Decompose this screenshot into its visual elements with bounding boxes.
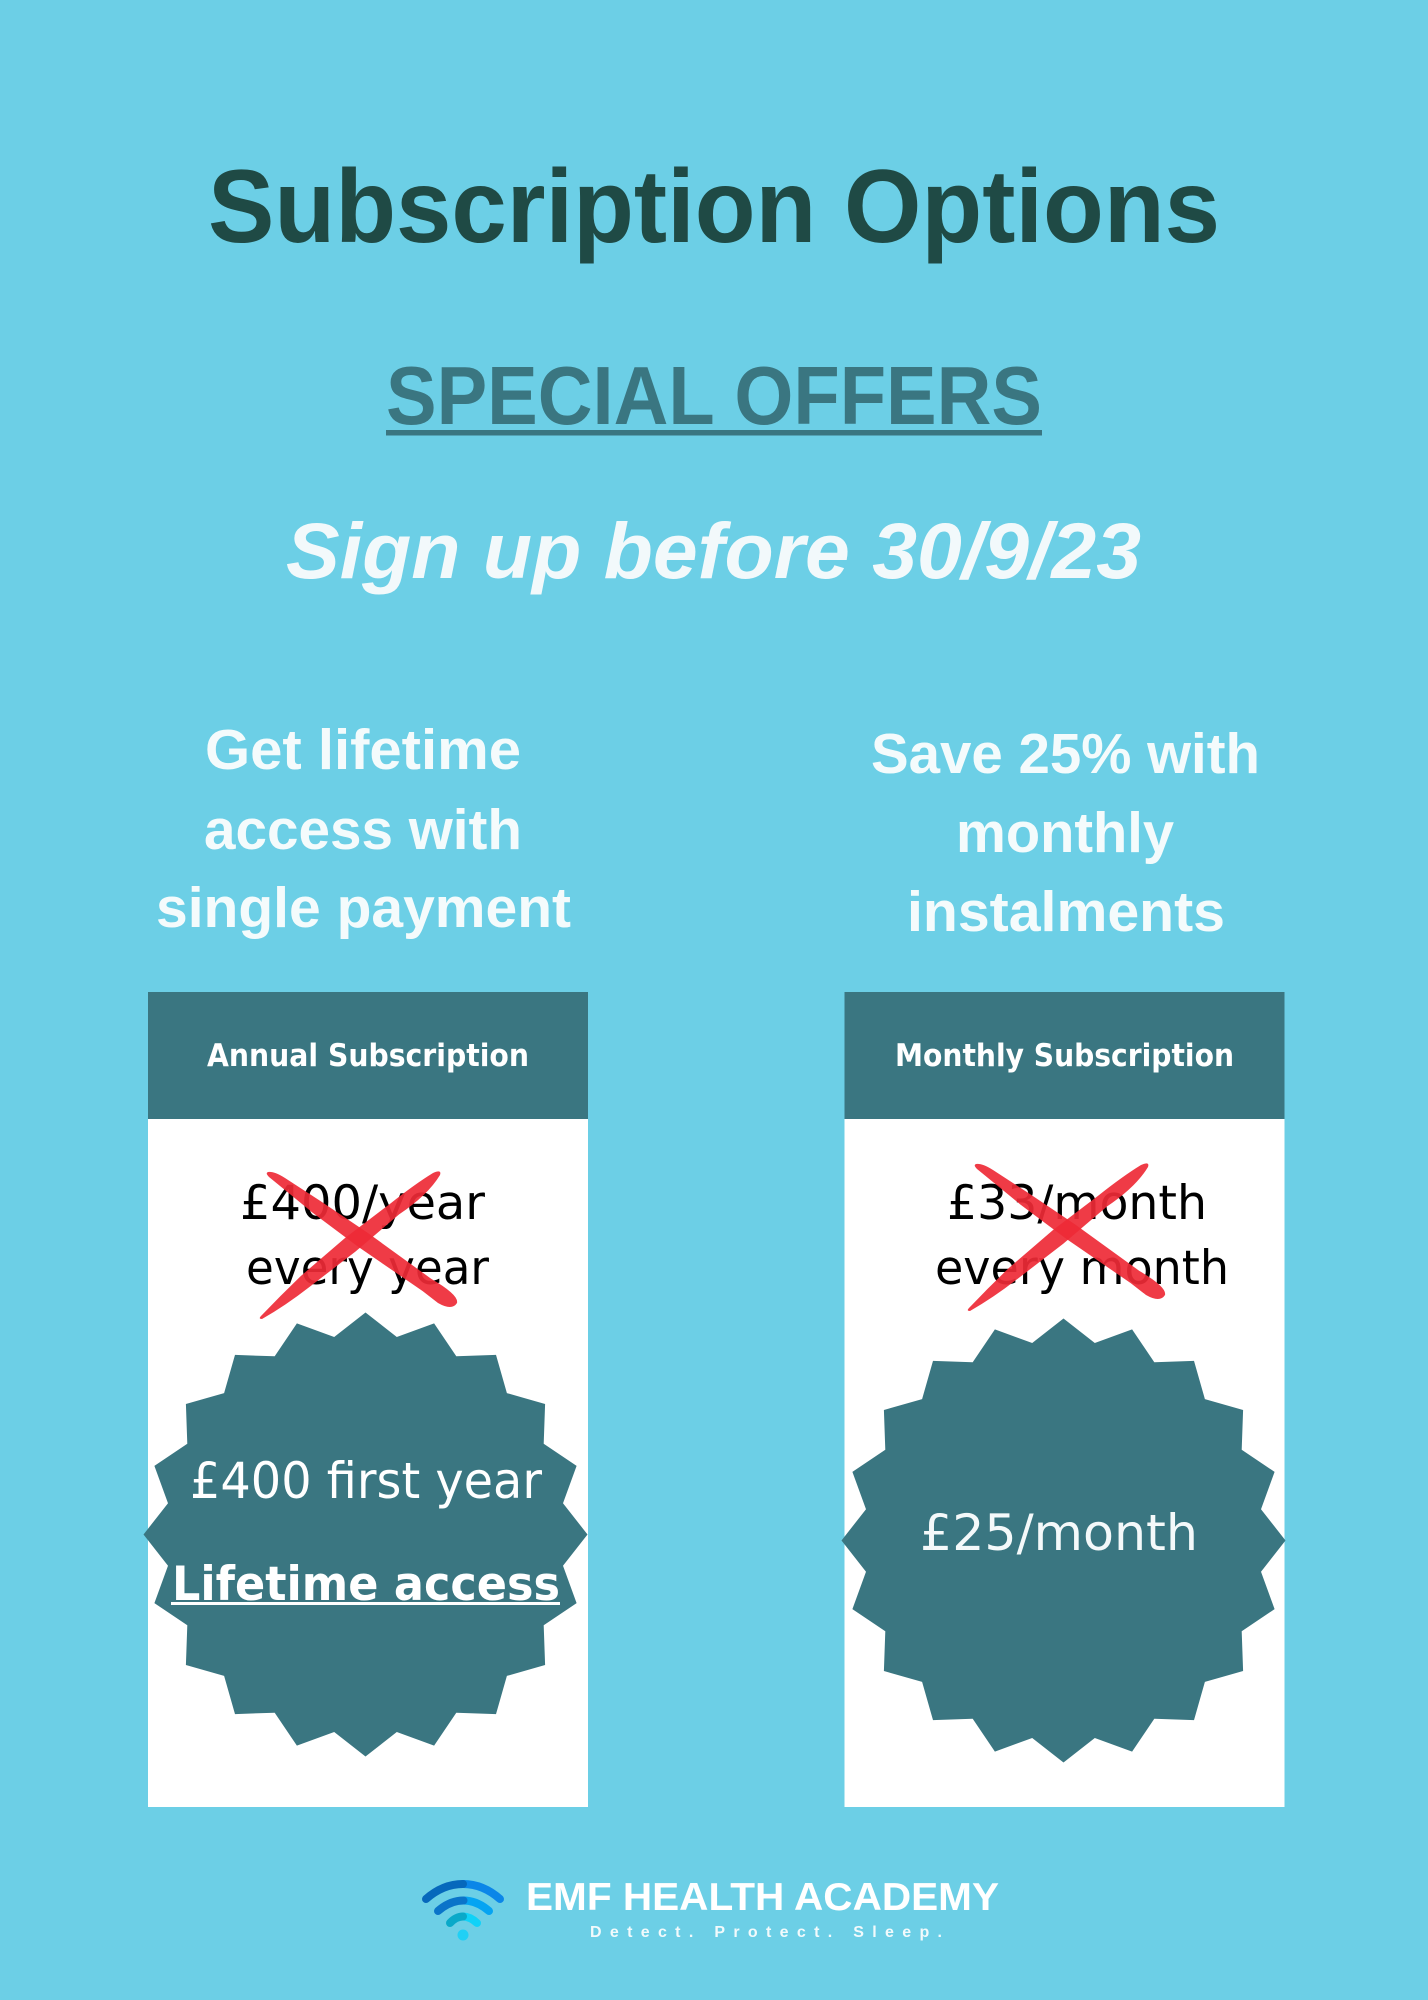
icon: wifi logo xyxy=(426,1884,500,1940)
badge: monthly offer: £25/month xyxy=(920,1504,1198,1562)
text block: lifetime access: single payment xyxy=(156,876,571,940)
badge: annual offer xyxy=(144,1312,588,1756)
badge: annual offer: Lifetime access xyxy=(172,1557,560,1612)
subheading: sign up deadline: Sign up before 30/9/23 xyxy=(286,506,1141,595)
panel: annual subscription xyxy=(144,992,588,1807)
old monthly price xyxy=(935,1176,1229,1296)
text block: lifetime access: Get lifetime xyxy=(205,718,521,782)
panel header: annual xyxy=(148,992,588,1119)
old monthly price: every month xyxy=(935,1241,1229,1296)
text block: monthly saving: Save 25% with xyxy=(871,722,1260,786)
badge: monthly offer xyxy=(842,1318,1286,1762)
old monthly price: £33/month xyxy=(947,1176,1207,1231)
text block: monthly saving: monthly xyxy=(956,801,1174,865)
icon: red cross over old annual price xyxy=(260,1171,457,1319)
tagline: Detect. Protect. Sleep. xyxy=(590,1924,942,1941)
panel header: annual: Annual Subscription xyxy=(207,1038,529,1074)
old annual price: every year xyxy=(246,1241,490,1296)
text block: lifetime access: access with xyxy=(204,798,522,862)
brand name: EMF HEALTH ACADEMY xyxy=(526,1876,999,1919)
text block: monthly saving: instalments xyxy=(907,880,1225,944)
old annual price xyxy=(240,1176,490,1296)
panel header: monthly: Monthly Subscription xyxy=(895,1038,1234,1074)
heading: special offers: SPECIAL OFFERS xyxy=(386,349,1042,442)
badge: annual offer: £400 first year xyxy=(190,1452,542,1510)
text block: monthly saving xyxy=(871,722,1260,944)
panel header: monthly xyxy=(844,992,1284,1119)
panel: monthly subscription xyxy=(842,992,1286,1807)
icon: red cross over old monthly price xyxy=(968,1163,1165,1311)
text block: lifetime access xyxy=(156,718,571,940)
title: Subscription Options xyxy=(208,149,1220,265)
old annual price: £400/year xyxy=(240,1176,486,1231)
